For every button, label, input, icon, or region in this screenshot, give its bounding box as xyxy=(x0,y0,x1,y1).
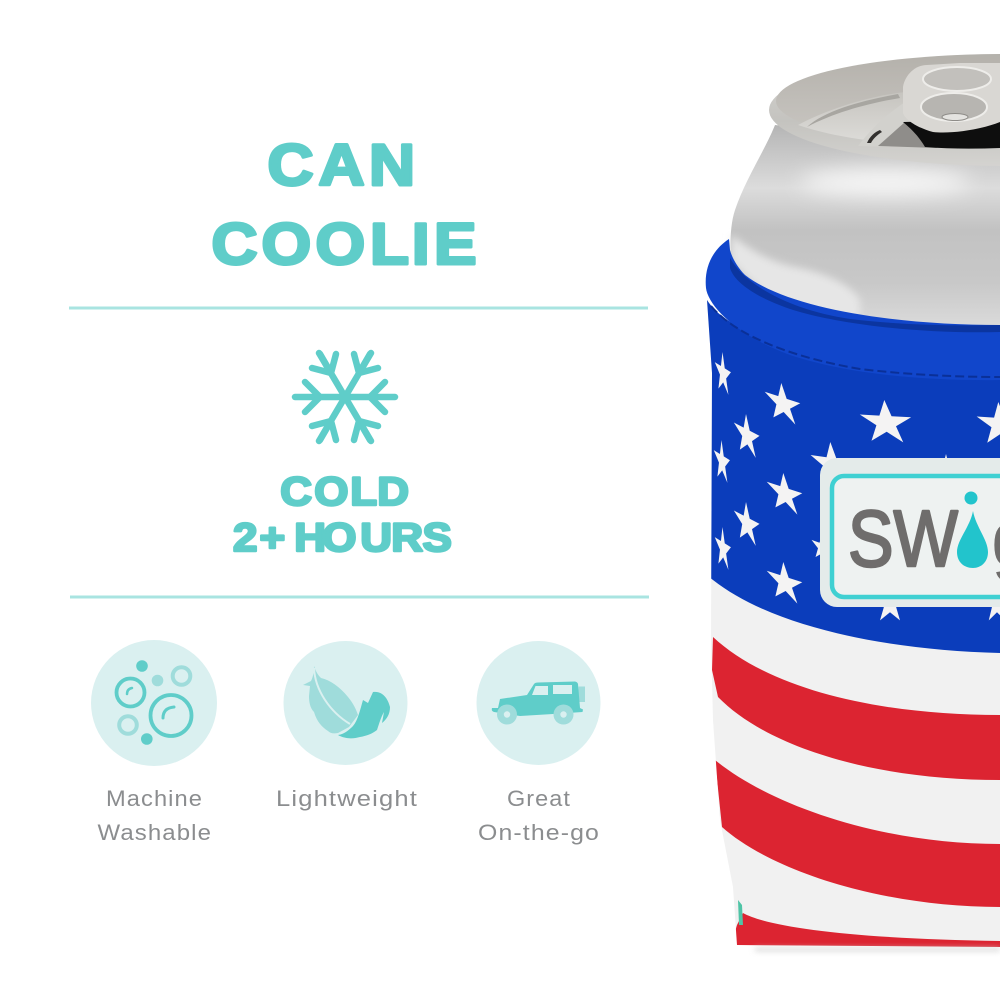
swig logo patch xyxy=(820,458,1000,607)
label: great on-the-go xyxy=(478,786,600,845)
icon: feather xyxy=(303,666,390,738)
white stars xyxy=(713,347,1000,620)
title: can coolie xyxy=(212,133,476,276)
label: great on-the-go: On-the-go xyxy=(478,820,600,845)
title: can coolie: COOLIE xyxy=(212,212,476,276)
label: machine washable xyxy=(98,786,212,845)
coolie body xyxy=(700,290,1000,950)
heading: cold 2+ hours xyxy=(233,469,452,560)
heading: cold 2+ hours: 2+ HOURS xyxy=(233,515,452,560)
feature: machine washable xyxy=(91,640,217,845)
red stripes xyxy=(712,637,1000,948)
feature: great on-the-go xyxy=(476,641,600,845)
heading: cold 2+ hours: COLD xyxy=(280,469,409,514)
ground shadow xyxy=(755,948,1000,951)
icon: jeep xyxy=(492,682,585,724)
label: machine washable: Machine xyxy=(106,786,203,811)
icon: bubbles xyxy=(116,660,192,745)
blue star field xyxy=(700,290,1000,653)
label: great on-the-go: Great xyxy=(507,786,571,811)
product photo: can in coolie xyxy=(700,54,1000,951)
can body xyxy=(730,125,1000,335)
icon: snowflake xyxy=(295,353,395,441)
label: lightweight: Lightweight xyxy=(276,786,418,811)
can rim and lid xyxy=(769,54,1000,166)
feature: lightweight xyxy=(276,641,418,811)
logo wordmark: SW xyxy=(848,494,958,583)
label: machine washable: Washable xyxy=(98,820,212,845)
blue collar xyxy=(706,239,1000,380)
title: can coolie: CAN xyxy=(268,133,415,197)
